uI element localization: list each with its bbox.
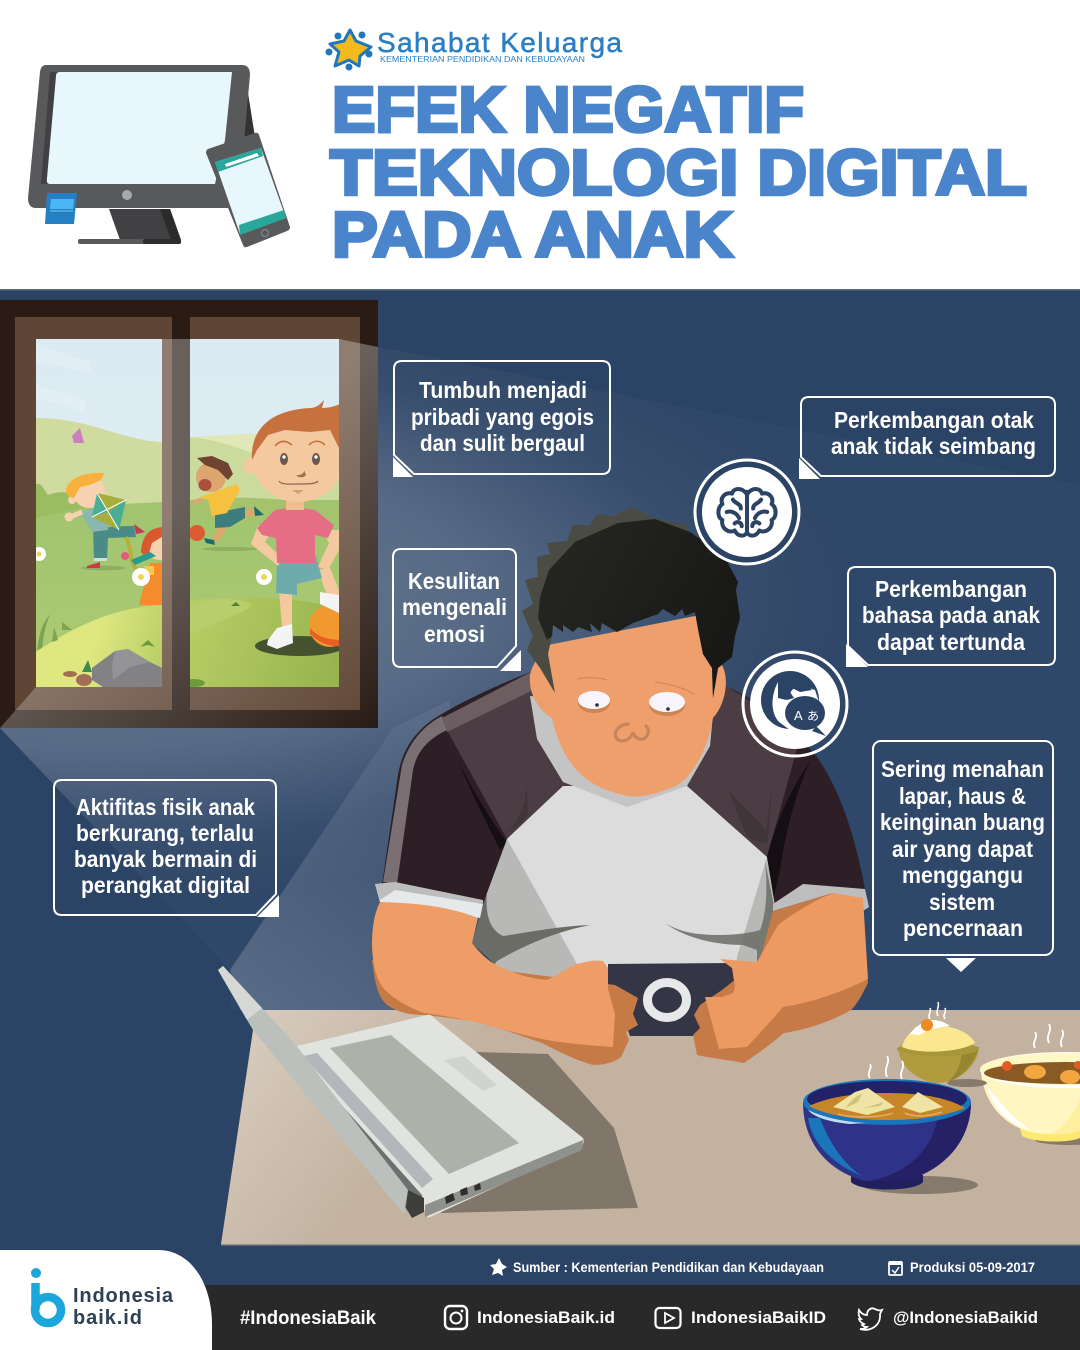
rock (92, 649, 162, 687)
title: EFEK NEGATIF (332, 74, 804, 146)
head (286, 500, 304, 510)
boy in yellow (213, 508, 257, 541)
flower (256, 569, 272, 585)
header background (0, 0, 1080, 289)
window light on frame (0, 339, 378, 728)
hashtag: #IndonesiaBaik (240, 1308, 376, 1329)
sleeve folds (458, 761, 810, 900)
callout: otak: Perkembangan otak (834, 407, 1034, 433)
logo: Sahabat Keluarga: KEMENTERIAN PENDIDIKAN DAN KEBUDAYAAN (380, 54, 585, 64)
callout: pencernaan: keinginan buang (880, 809, 1045, 835)
callout: pencernaan: Sering menahan (881, 756, 1044, 782)
callout: pencernaan: sistem (929, 889, 995, 915)
callout: emosi (393, 549, 521, 671)
callout: egois: dan sulit bergaul (420, 430, 585, 456)
callout: aktifitas: Aktifitas fisik anak (76, 794, 255, 820)
icon: language globe (743, 652, 847, 756)
title (330, 74, 1027, 270)
girl (139, 563, 162, 605)
instagram: IndonesiaBaik.id (477, 1308, 615, 1327)
cuffs (375, 884, 483, 918)
shorts (276, 556, 322, 595)
arms (251, 525, 282, 566)
callout: bahasa (846, 567, 1055, 667)
left arm (372, 960, 638, 1065)
laptop (218, 966, 638, 1218)
callout: aktifitas (54, 780, 279, 917)
callout: bahasa: dapat tertunda (877, 629, 1025, 655)
hair inner (538, 519, 740, 698)
callout: pencernaan: pencernaan (903, 915, 1023, 941)
twitter: @IndonesiaBaikid (893, 1308, 1038, 1327)
right arm (693, 893, 868, 1063)
callout: bahasa: Perkembangan (875, 576, 1027, 602)
logo panel: Indonesia Baik: baik.id (73, 1307, 142, 1329)
callout: emosi: Kesulitan (408, 568, 500, 594)
icon: brain (695, 460, 799, 564)
callout: egois: pribadi yang egois (411, 404, 594, 430)
callout: aktifitas: berkurang, terlalu (76, 820, 254, 846)
hill (190, 598, 339, 687)
youtube: IndonesiaBaikID (691, 1308, 826, 1327)
bowl: cream soup (980, 1024, 1080, 1145)
title: PADA ANAK (332, 198, 733, 270)
butterfly (72, 428, 84, 443)
callout: egois (393, 361, 610, 477)
sleeves (382, 671, 865, 904)
callout: otak (799, 397, 1055, 479)
eyes (578, 693, 610, 713)
icon: language globe: A (794, 708, 803, 723)
collar (530, 696, 713, 807)
callout: emosi: emosi (424, 621, 485, 647)
callout: aktifitas: perangkat digital (81, 872, 250, 898)
callout: pencernaan: lapar, haus & (899, 783, 1026, 809)
production date: Produksi 05-09-2017 (910, 1260, 1035, 1275)
scene background (0, 289, 1080, 1289)
big boy legs (279, 593, 292, 627)
hair (522, 507, 740, 698)
logo: Sahabat Keluarga: Sahabat Keluarga (377, 27, 622, 58)
callout: bahasa: bahasa pada anak (862, 602, 1040, 628)
nose (615, 724, 648, 741)
callout: pencernaan (873, 741, 1053, 972)
callout: pencernaan: air yang dapat (892, 836, 1033, 862)
light beam from laptop (230, 700, 450, 1010)
icon: language globe: あ (807, 709, 819, 723)
callout: pencernaan: menggangu (902, 862, 1023, 888)
callout: emosi: mengenali (402, 594, 507, 620)
shirt (257, 507, 334, 563)
phone (588, 963, 735, 1036)
bowl: rice (897, 1002, 987, 1087)
person (372, 507, 869, 1065)
callout: otak: anak tidak seimbang (831, 433, 1036, 459)
flower (36, 547, 46, 561)
twitter (859, 1308, 1038, 1330)
instagram (445, 1306, 615, 1329)
face (530, 615, 726, 797)
logo panel: Indonesia Baik: Indonesia (73, 1285, 174, 1307)
panel: window (0, 300, 378, 728)
kite boy (93, 526, 136, 560)
footer band (0, 1285, 1080, 1350)
ball big (309, 606, 339, 647)
source line: Sumber : Kementerian Pendidikan dan Kebudayaan (513, 1260, 824, 1275)
logo: Sahabat Keluarga (326, 27, 622, 70)
foreground hill (36, 605, 162, 687)
icon: monitor and phone (28, 65, 290, 247)
light beam from window (0, 339, 1080, 1010)
logo panel: Indonesia Baik (0, 1250, 212, 1350)
callout: egois: Tumbuh menjadi (419, 377, 587, 403)
callout: aktifitas: banyak bermain di (74, 846, 257, 872)
shoulder (442, 671, 798, 857)
shirt (472, 786, 780, 990)
scene: children playing outside (32, 339, 351, 687)
panel: table (221, 1010, 1080, 1244)
ball (189, 525, 205, 541)
bowl: blue soup (803, 1056, 978, 1194)
title: TEKNOLOGI DIGITAL (330, 136, 1027, 208)
